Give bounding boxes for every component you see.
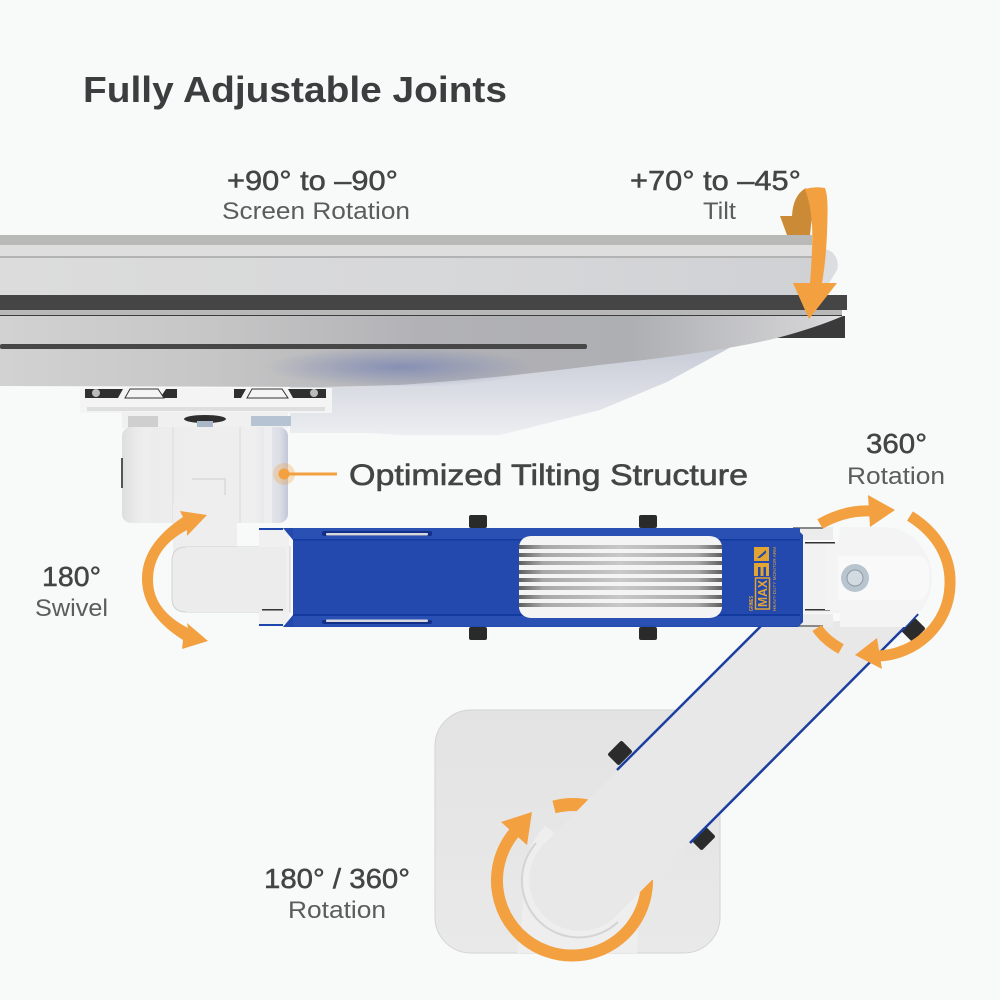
arrow: elbow rotation — [817, 495, 950, 669]
title: Fully Adjustable Joints — [83, 69, 507, 110]
label: elbow rotation — [847, 428, 945, 490]
label: elbow rotation: Rotation — [847, 463, 945, 490]
logo: GRIMES — [749, 596, 755, 611]
label: tilt: Tilt — [703, 198, 736, 225]
label: tilt — [630, 165, 801, 225]
callout: optimized tilting structure: Optimized Tilting Structure — [349, 459, 748, 492]
dark bezel — [0, 295, 847, 310]
label: screen rotation — [222, 165, 410, 225]
label: swivel: Swivel — [35, 595, 108, 622]
arrow: tilt — [780, 187, 837, 319]
label: tilt: +70° to –45° — [630, 165, 801, 196]
lower arm knobs — [607, 617, 926, 851]
lower arm — [522, 614, 918, 937]
elbow joint — [793, 527, 932, 627]
lower back panel — [0, 316, 843, 387]
VESA mount plate — [80, 388, 332, 428]
soft shadow under the monitor — [290, 338, 777, 435]
label: elbow rotation: 360° — [866, 428, 927, 459]
blue reflection — [265, 347, 535, 387]
label: swivel: 180° — [42, 561, 101, 592]
label: base rotation: 180° / 360° — [264, 863, 410, 894]
heatsink fins — [519, 536, 722, 618]
arrow: swivel — [142, 511, 208, 649]
right rear wedge — [777, 316, 845, 338]
slots — [322, 531, 432, 536]
monitor side view — [0, 235, 847, 435]
upper arm blue channel — [186, 528, 803, 627]
label: base rotation — [264, 863, 410, 924]
top bands — [0, 235, 812, 245]
swivel bracket — [172, 503, 290, 612]
rotation arrow: base, behind arm — [497, 805, 647, 956]
label: screen rotation: Screen Rotation — [222, 198, 410, 225]
slot — [0, 344, 587, 349]
base plate and ridge — [435, 710, 720, 953]
rear housing edge — [800, 240, 838, 295]
tilt joint cylinder — [121, 427, 288, 523]
label: swivel — [35, 561, 108, 622]
upper arm knobs — [469, 515, 657, 640]
label: screen rotation: +90° to –90° — [227, 165, 398, 196]
logo: MAX — [755, 580, 770, 607]
logo: HEAVY-DUTY MONITOR ARM — [772, 547, 777, 611]
logo — [749, 547, 777, 611]
label: base rotation: Rotation — [288, 897, 386, 924]
